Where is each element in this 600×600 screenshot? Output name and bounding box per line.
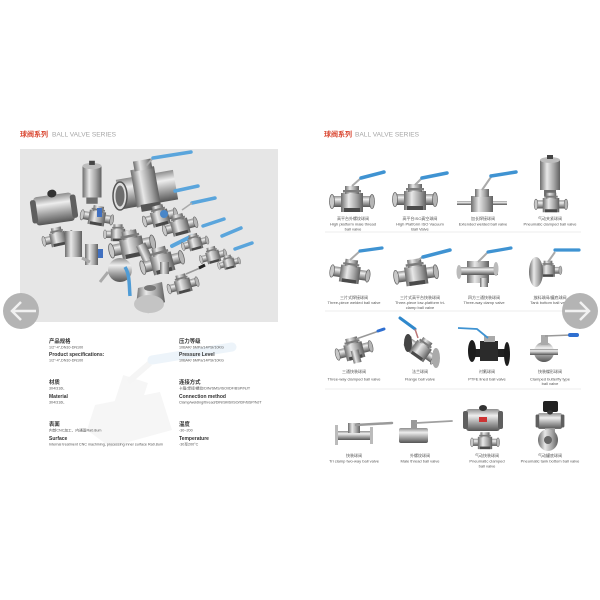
product: three-way clamp valve — [456, 248, 511, 305]
three way small black handle valve — [165, 265, 205, 297]
row dividers — [325, 232, 581, 389]
product: pneumatic clamped ball valve: 气动快装球阀 — [475, 452, 499, 458]
specs: product specifications: 1/2"-4",DN10-DN100 — [49, 358, 83, 362]
left title — [20, 130, 117, 138]
product: pneumatic clamped ball valve: Pneumatic clamped ball valve — [524, 222, 577, 226]
specs: connection method: 卡箍/焊接/螺纹/DIN/SMS/ISO/IDF/BSP/NJT — [179, 386, 251, 390]
product: pneumatic clamped ball valve — [463, 405, 505, 468]
right title: 球阀系列 — [324, 130, 352, 138]
arrow: next — [562, 293, 598, 329]
specs: pressure level: 10BAR/ 6MPa/14PSI/10KG — [179, 346, 224, 350]
product: three-way clamp valve: 四方三通快装球阀 — [468, 294, 500, 300]
panel: product family photo — [20, 149, 278, 322]
product: three-piece welded ball valve: 三片式焊接球阀 — [340, 294, 368, 300]
specs: pressure level: 压力等级 — [179, 337, 201, 345]
product: flange ball valve: Flange ball valve — [405, 376, 436, 382]
specs: temperature: -30至200°C — [179, 442, 199, 446]
product: three-way clamp valve: Three-way clamp valve — [463, 300, 505, 305]
product: three-way clamped ball valve: 三通快装球阀 — [342, 368, 366, 374]
product: clamped butterfly type ball valve — [530, 335, 577, 386]
product: tank bottom ball valve: 放料球阀/罐底球阀 — [533, 294, 567, 300]
sanitary valve group center — [65, 224, 158, 267]
product: extended welded ball valve — [457, 172, 516, 226]
right title: BALL VALVE SERIES — [355, 132, 420, 138]
product: high platform male thread ball valve: High platform male thread — [330, 222, 376, 226]
product: three-piece welded ball valve: Three-piece welded ball valve — [328, 300, 381, 305]
specs: material: 304/316L — [49, 386, 64, 390]
product: three-piece low-platform tri-clamp ball valve: Three-piece low-platform tri- — [395, 300, 446, 305]
product: three-piece low-platform tri-clamp ball valve: clamp ball valve — [406, 305, 435, 310]
specs: connection method: 连接方式 — [179, 378, 201, 386]
product: three-piece low-platform tri-clamp ball valve: 三片式高平台快装球阀 — [400, 294, 440, 300]
specs: pressure level: Pressure Level — [179, 352, 215, 358]
product: three-piece low-platform tri-clamp ball valve — [392, 250, 450, 310]
product: pneumatic tank bottom ball valve: Pneumatic tank bottom ball valve — [521, 458, 580, 464]
product: clamped butterfly type ball valve: ball valve — [542, 381, 559, 386]
specs: surface: Internal treatment CNC machining, processing inner surface Ra0.8um — [49, 442, 163, 446]
product: PTFE lined ball valve: 衬氟球阀 — [479, 368, 495, 374]
specs: surface: 内部CNC加工、内通面Ra0.8um — [49, 428, 101, 432]
specs: material: 304/316L — [49, 400, 64, 404]
product: pneumatic tank bottom ball valve — [521, 401, 580, 464]
large ball valve — [113, 152, 191, 215]
specs: temperature: -30~200 — [179, 428, 193, 432]
product: male thread ball valve — [399, 420, 452, 464]
product: PTFE lined ball valve — [458, 328, 510, 382]
product: pneumatic clamped ball valve: 气动夹紧球阀 — [538, 215, 562, 221]
product: clamped butterfly type ball valve: Clamped butterfly type — [530, 376, 571, 382]
specs: material: 材质 — [49, 378, 60, 386]
product: tri clamp two-way ball valve: 快装球阀 — [346, 452, 362, 458]
butterfly ball valve and handle — [100, 258, 132, 296]
right title — [324, 130, 420, 138]
product: male thread ball valve: Male thread ball valve — [401, 458, 440, 464]
specs: temperature: 温度 — [179, 420, 190, 428]
specs: product specifications — [49, 337, 105, 362]
product: pneumatic clamped ball valve: Pneumatic clamped — [469, 458, 505, 464]
valves row with blue handles — [140, 186, 252, 272]
product: three-way clamped ball valve — [328, 329, 384, 382]
product: PTFE lined ball valve: PTFE lined ball valve — [468, 376, 507, 382]
product: tri clamp two-way ball valve: Tri clamp two-way ball valve — [329, 458, 380, 464]
left title: BALL VALVE SERIES — [52, 132, 117, 138]
specs: temperature — [179, 420, 209, 446]
pneumatic cylinder valve — [79, 161, 116, 228]
product: clamped butterfly type ball valve: 快装蝶形球阀 — [538, 368, 562, 374]
specs: connection method: Clamp/welding/thread/DIN/SMS/ISO/IDF/BSP/NJT — [179, 400, 262, 404]
specs: pressure level — [179, 337, 224, 362]
product: high platform ISO vacuum ball valve: Ball Valve — [411, 226, 430, 232]
product: tri clamp two-way ball valve — [329, 423, 392, 464]
specs: product specifications: 产品规格 — [49, 337, 71, 345]
product: male thread ball valve: 外螺纹球阀 — [410, 452, 430, 458]
specs: surface — [49, 420, 163, 446]
product: extended welded ball valve: Extended welded ball valve — [459, 222, 508, 226]
product: flange ball valve — [400, 318, 443, 382]
specs: product specifications: Product specifications: — [49, 352, 105, 358]
left title: 球阀系列 — [20, 130, 48, 138]
product: extended welded ball valve: 加长焊接球阀 — [471, 215, 495, 221]
specs: material: Material — [49, 394, 69, 400]
specs: surface: 表面 — [49, 420, 60, 428]
product: tank bottom ball valve — [529, 250, 579, 305]
specs: pressure level: 10BAR/ 6MPa/14PSI/10KG — [179, 358, 224, 362]
product: high platform ISO vacuum ball valve — [392, 173, 447, 232]
product: pneumatic clamped ball valve: ball valve — [479, 464, 496, 468]
specs: material — [49, 378, 69, 404]
product: high platform male thread ball valve: 高平台外螺纹球阀 — [337, 215, 369, 221]
product: pneumatic clamped ball valve — [524, 155, 577, 226]
product: flange ball valve: 法兰球阀 — [412, 368, 428, 374]
pneumatic actuator valve — [29, 186, 79, 249]
product: three-piece welded ball valve — [328, 248, 382, 305]
specs: temperature: Temperature — [179, 436, 209, 442]
product: pneumatic tank bottom ball valve: 气动罐底球阀 — [538, 452, 562, 458]
product: high platform ISO vacuum ball valve: 高平台ISO真空球阀 — [403, 215, 437, 221]
product: high platform male thread ball valve: ball valve — [345, 226, 362, 232]
product: three-way clamped ball valve: Three-way clamped ball valve — [328, 376, 381, 382]
product: tank bottom ball valve: Tank bottom ball valve — [530, 300, 571, 305]
specs: product specifications: 1/2"-4",DN10-DN100 — [49, 346, 83, 350]
product: high platform ISO vacuum ball valve: High Platform ISO Vacuum — [396, 222, 445, 226]
specs: connection method: Connection method — [179, 394, 226, 400]
specs: connection method — [179, 378, 262, 404]
three way valve with handle — [136, 236, 192, 278]
ghost valve watermark — [87, 347, 232, 447]
product: high platform male thread ball valve — [330, 172, 384, 232]
tank bottom valve — [134, 282, 165, 314]
specs: surface: Surface — [49, 436, 68, 442]
arrow: previous — [3, 293, 39, 329]
